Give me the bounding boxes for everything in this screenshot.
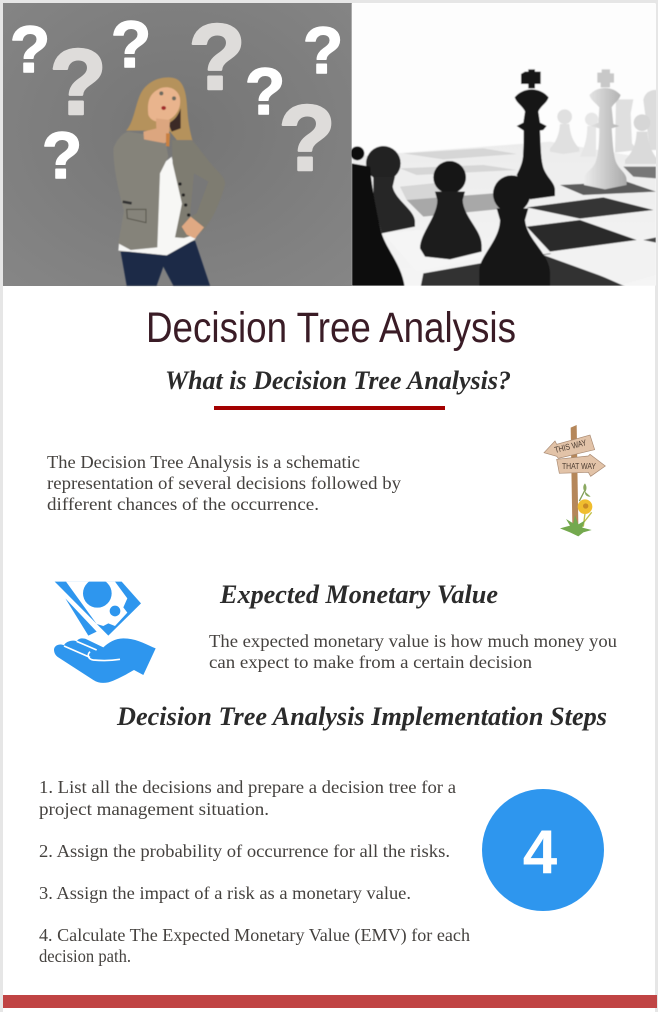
chess board — [352, 142, 656, 290]
black chess pieces — [350, 69, 555, 290]
badge: number 4 in blue circle: 4 — [523, 818, 558, 887]
question marks: ? — [50, 30, 106, 134]
question marks: ? — [245, 54, 285, 128]
list: implementation steps: 1. List all the decisions and prepare a decision tree for a — [39, 777, 456, 797]
question marks: ? — [42, 118, 82, 192]
list: implementation steps: 3. Assign the impact of a risk as a monetary value. — [39, 883, 411, 903]
hand — [54, 638, 156, 683]
text block: expected monetary value: can expect to make from a certain decision — [209, 652, 532, 672]
icon: wooden signpost — [544, 425, 605, 536]
text block: definition: The Decision Tree Analysis is a schematic — [47, 452, 360, 472]
question marks: ? — [279, 86, 335, 190]
heading: expected monetary value: Expected Monetary Value — [219, 580, 498, 609]
photo: chess pieces on board — [347, 0, 663, 290]
question marks: ? — [10, 12, 50, 86]
heading: implementation steps: Decision Tree Analysis Implementation Steps — [116, 702, 607, 731]
woman figure — [113, 77, 225, 286]
list: implementation steps: project management situation. — [39, 799, 269, 819]
heading underline — [214, 406, 445, 410]
question marks: ? — [111, 7, 151, 81]
list: implementation steps: 2. Assign the probability of occurrence for all the risks. — [39, 841, 450, 861]
footer bar — [3, 995, 657, 1008]
text block: definition — [47, 452, 401, 514]
text block: definition: different chances of the occurrence. — [47, 494, 319, 514]
question marks: ? — [189, 5, 245, 109]
badge: number 4 in blue circle — [482, 789, 604, 911]
list: implementation steps: decision path. — [39, 946, 131, 966]
icon: hand receiving money — [54, 579, 156, 683]
icon: wooden signpost: THAT WAY — [562, 461, 596, 471]
title: Decision Tree Analysis — [146, 304, 516, 352]
question marks — [10, 5, 343, 192]
list: implementation steps: 4. Calculate The Expected Monetary Value (EMV) for each — [39, 925, 470, 946]
white chess pieces — [550, 69, 658, 189]
question marks: ? — [303, 13, 343, 87]
heading: what is decision tree analysis: What is Decision Tree Analysis? — [165, 366, 511, 395]
icon: wooden signpost: THIS WAY — [553, 437, 588, 455]
banknote — [55, 579, 141, 636]
photo: woman thinking with question marks — [3, 3, 352, 286]
list: implementation steps — [39, 777, 470, 966]
text block: expected monetary value — [209, 631, 617, 672]
text block: definition: representation of several decisions followed by — [47, 473, 401, 493]
text block: expected monetary value: The expected monetary value is how much money you — [209, 631, 617, 651]
